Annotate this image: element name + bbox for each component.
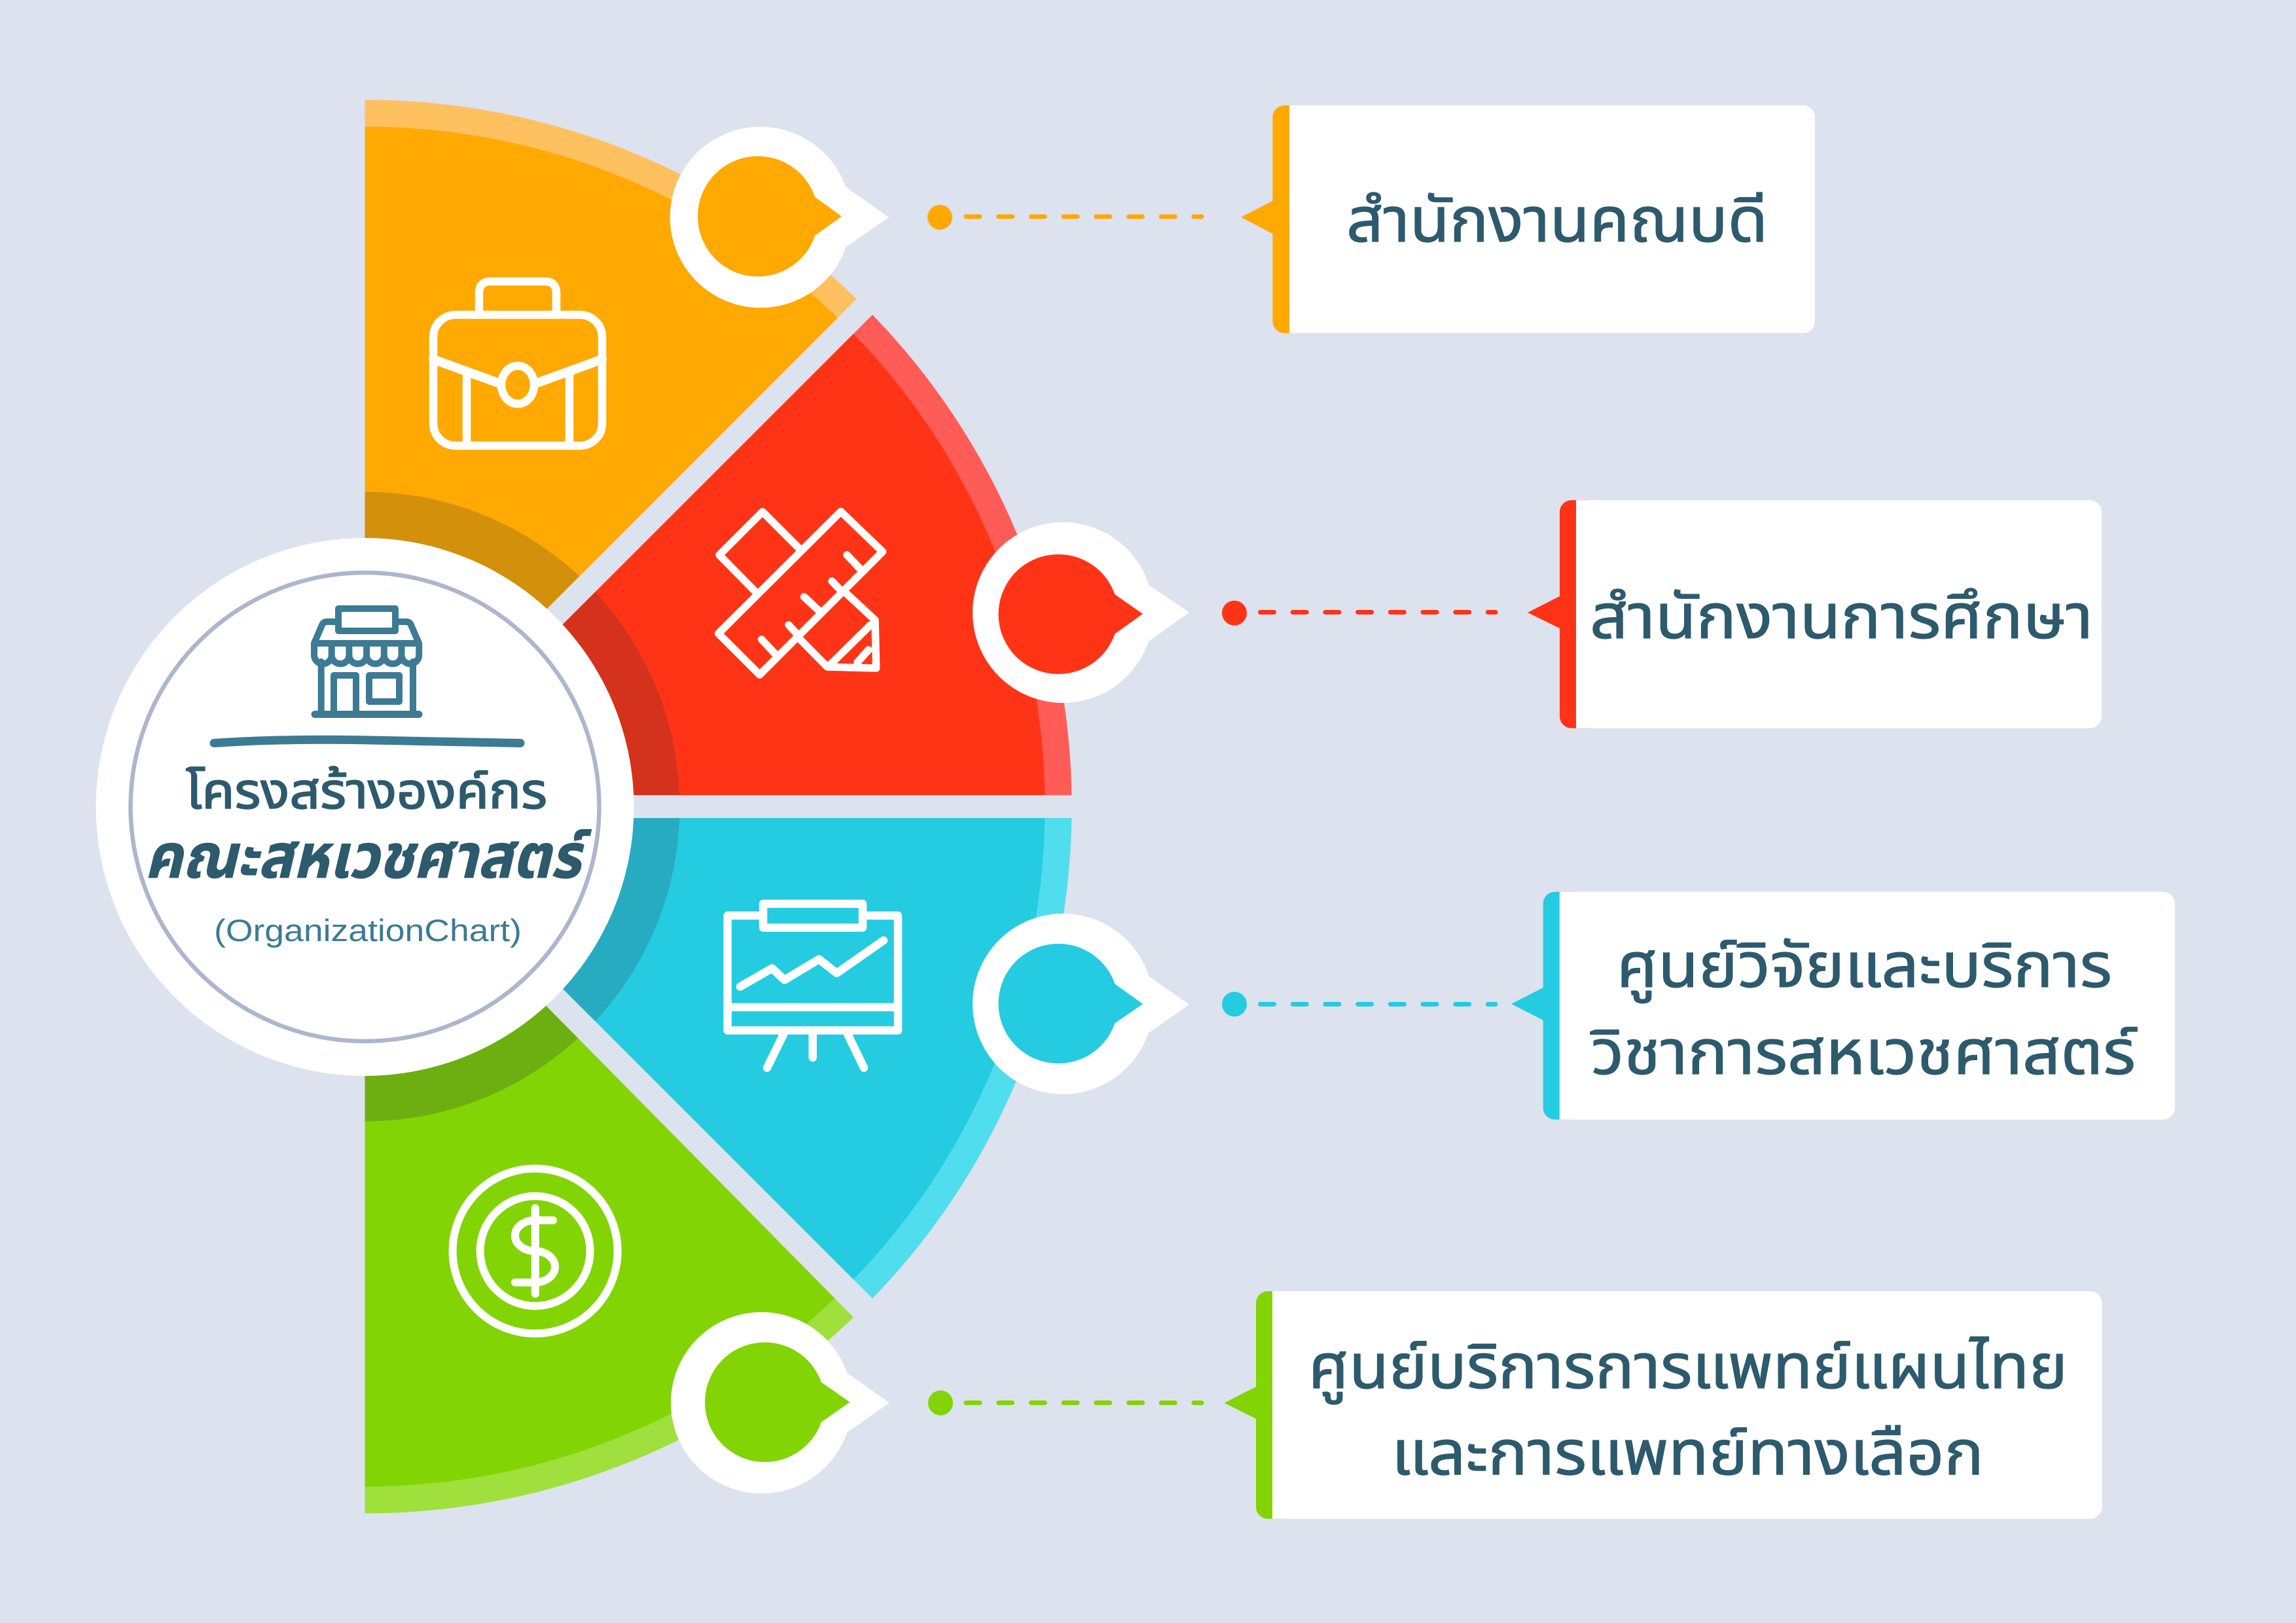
icon: presentation board	[728, 904, 898, 1068]
icon: store	[314, 609, 419, 715]
icon: ruler and pencil	[719, 512, 882, 675]
bubble: green	[671, 1312, 889, 1493]
connector: cyan	[1222, 992, 1496, 1017]
label line 2: วิชาการสหเวชศาสตร์	[1590, 1018, 2138, 1088]
bubble: cyan	[973, 914, 1189, 1094]
card: ศูนย์บริการการแพทย์แผนไทยและการแพทย์ทางเลือก	[1224, 1291, 2102, 1519]
sector: orange	[365, 99, 857, 609]
title line 2: คณะสหเวชศาสตร์	[145, 822, 592, 891]
title line 1: โครงสร้างองค์กร	[186, 764, 547, 819]
sector: green	[365, 1005, 853, 1513]
divider brush stroke	[214, 740, 520, 743]
sector: cyan	[563, 818, 1072, 1298]
bubble: red	[973, 522, 1189, 703]
connector: red	[1222, 601, 1496, 626]
icon: briefcase	[433, 281, 602, 446]
bubble: orange	[670, 127, 889, 308]
center circle	[96, 538, 634, 1076]
card: ศูนย์วิจัยและบริการวิชาการสหเวชศาสตร์	[1511, 892, 2175, 1120]
label line 1: ศูนย์วิจัยและบริการ	[1617, 931, 2112, 1003]
connector: orange	[927, 205, 1202, 230]
label line 1: ศูนย์บริการการแพทย์แผนไทย	[1308, 1332, 2068, 1404]
label line 2: และการแพทย์ทางเลือก	[1391, 1419, 1984, 1488]
sector: red	[563, 315, 1072, 795]
card: สำนักงานคณบดี	[1241, 105, 1815, 333]
connector: green	[928, 1391, 1202, 1416]
label: สำนักงานคณบดี	[1346, 186, 1768, 255]
icon: dollar coin	[453, 1169, 618, 1334]
subtitle: (OrganizationChart)	[214, 913, 522, 948]
card: สำนักงานการศึกษา	[1528, 500, 2102, 728]
label: สำนักงานการศึกษา	[1590, 582, 2093, 652]
